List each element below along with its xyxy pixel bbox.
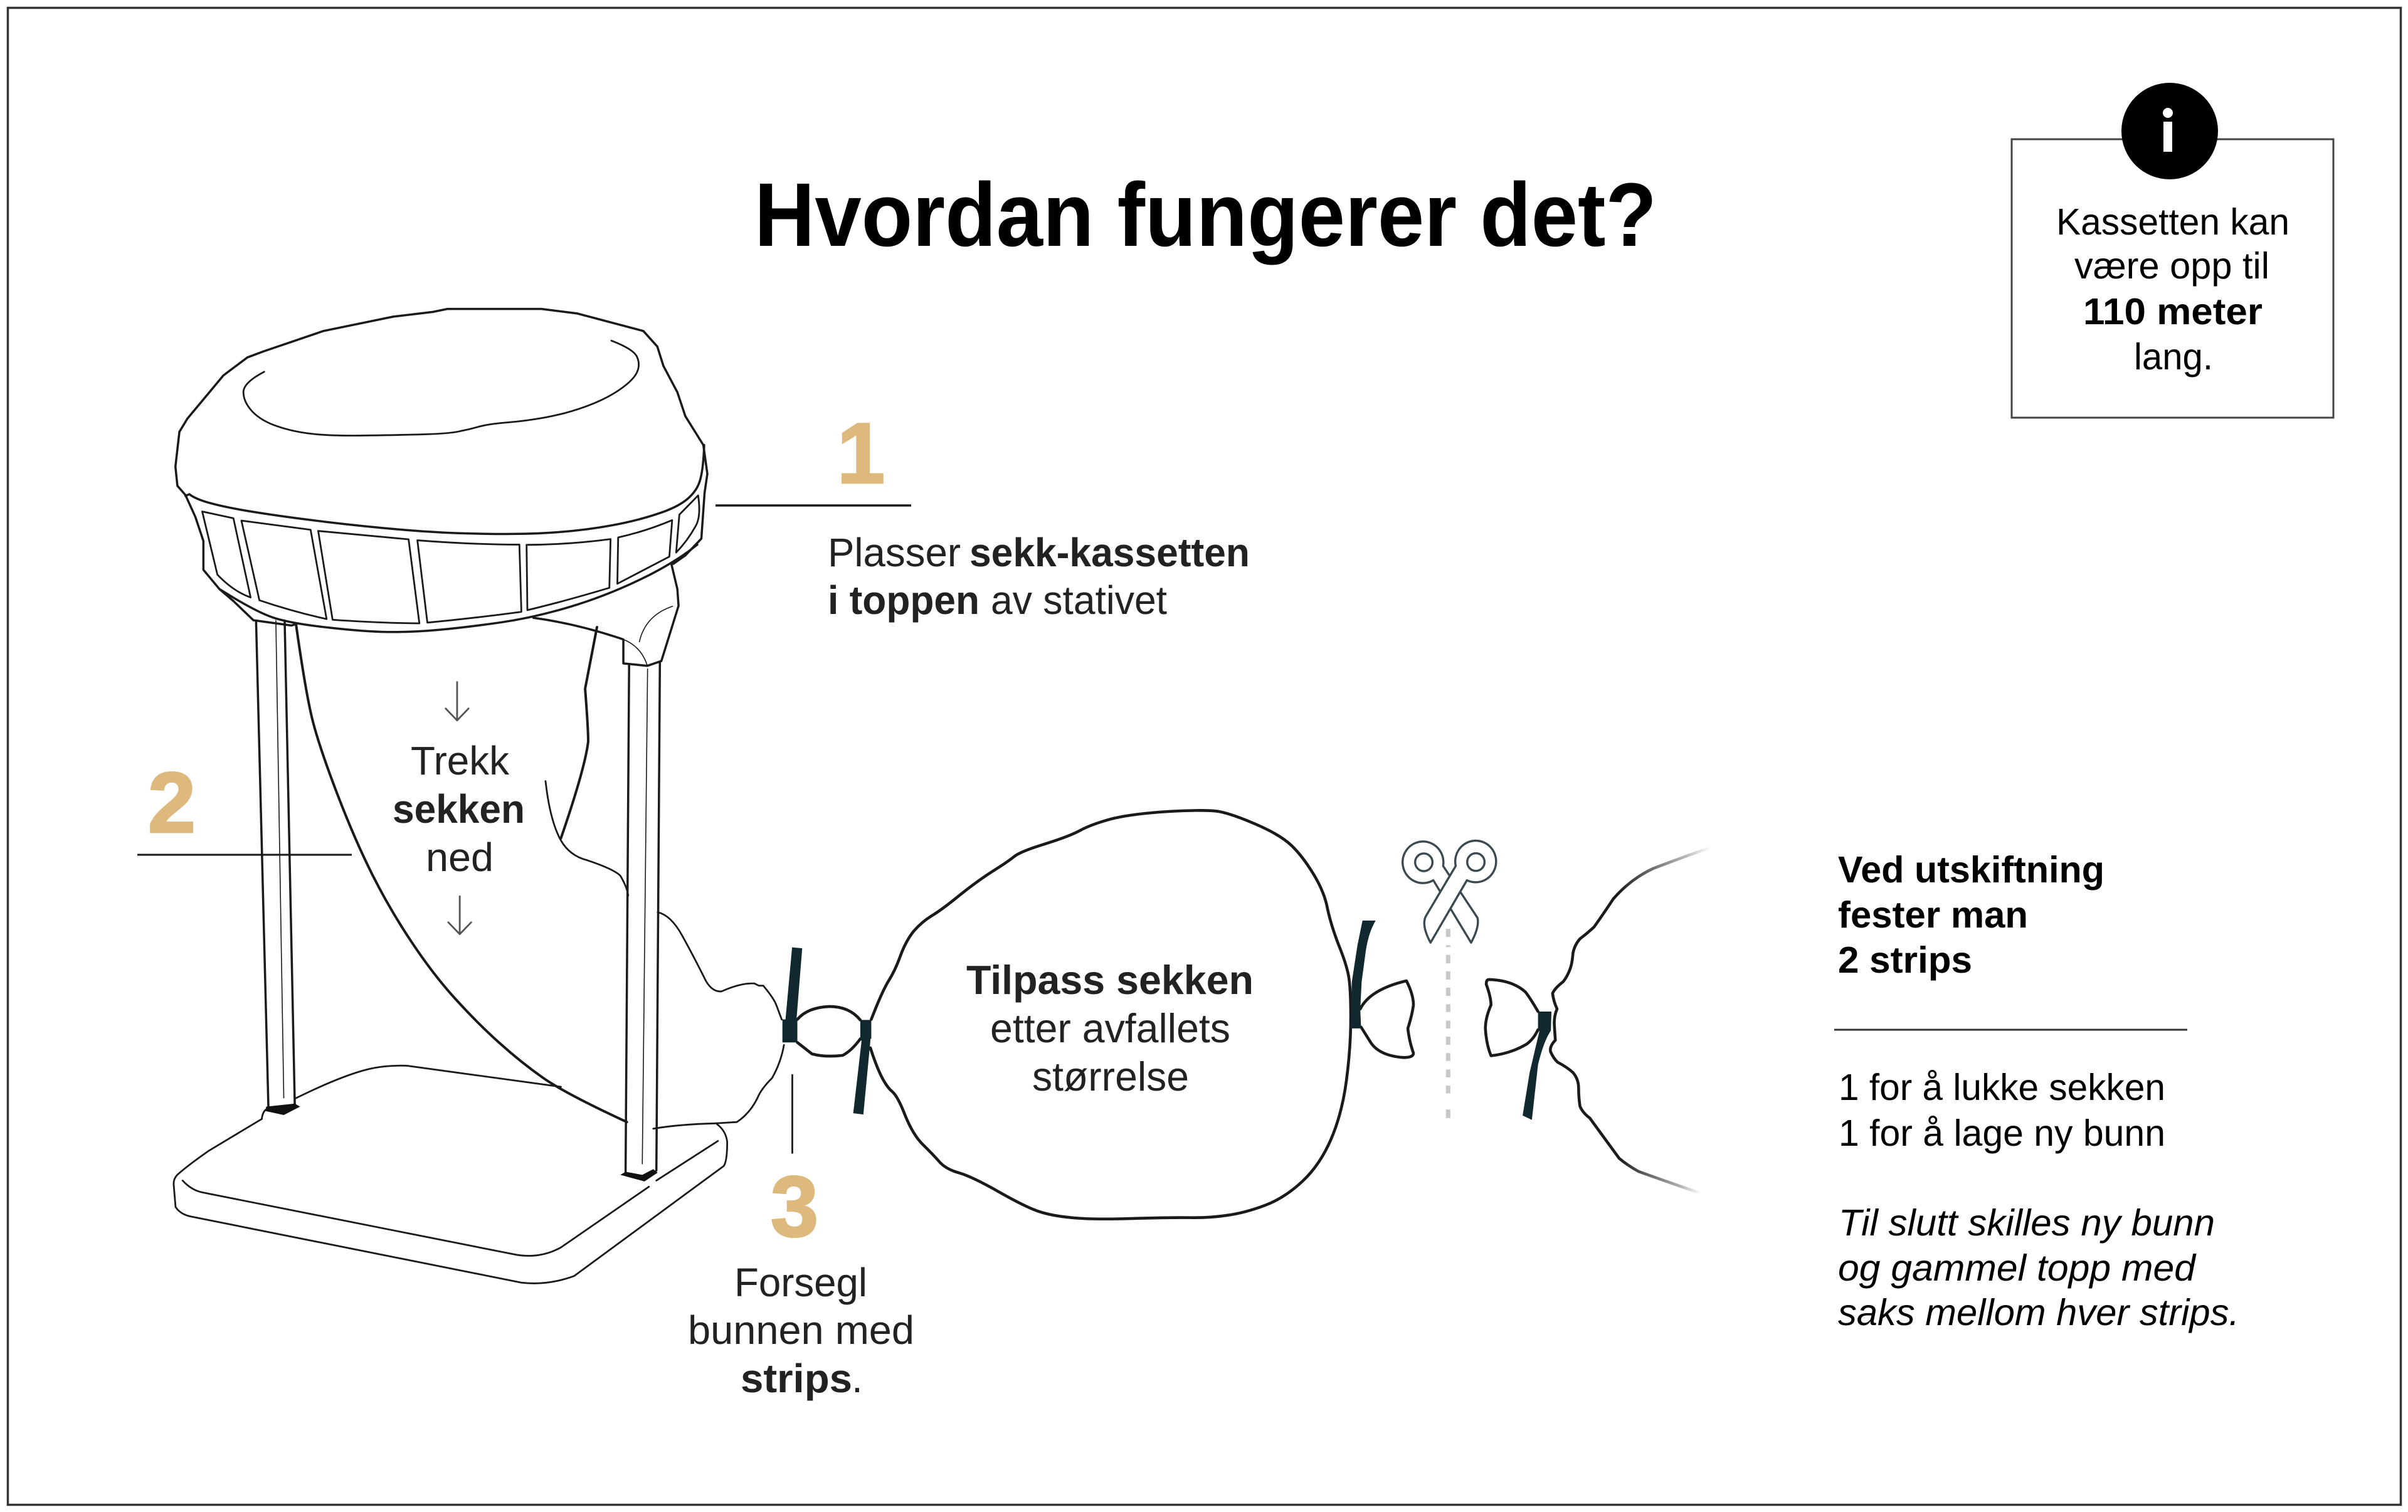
step 2 text: sekken xyxy=(393,786,525,832)
right strip xyxy=(1523,1012,1551,1120)
band upper edge xyxy=(186,445,704,534)
step 1 text: Plasser xyxy=(828,530,961,575)
step 3 text: Forsegl xyxy=(734,1260,867,1305)
right leg xyxy=(620,662,660,1182)
icon: info circle xyxy=(2121,83,2218,179)
step 3 text: . xyxy=(852,1356,863,1401)
illustration: sealed bag xyxy=(783,810,1351,1219)
arrow: down lower xyxy=(448,896,471,934)
info text xyxy=(2056,201,2289,378)
step 3 text xyxy=(688,1260,914,1401)
step 1 text xyxy=(828,530,1250,623)
stand legs, base and bag xyxy=(174,620,792,1283)
step 3 xyxy=(688,1159,914,1401)
sealed bag text: Tilpass sekken xyxy=(966,957,1254,1003)
cut line dashed xyxy=(1446,929,1450,1118)
right bag upper fade xyxy=(1613,847,1713,899)
number 3: 3 xyxy=(771,1159,818,1255)
step 1 xyxy=(716,406,1250,623)
step 2 text xyxy=(393,738,525,880)
step 2 text: Trekk xyxy=(411,738,510,783)
band panels xyxy=(202,495,699,623)
bag behind leg to strip xyxy=(653,912,784,1129)
left leg xyxy=(256,620,300,1115)
info text: lang. xyxy=(2134,336,2213,378)
base plate xyxy=(174,1065,727,1283)
left connector xyxy=(219,589,297,625)
right knot end xyxy=(1486,980,1538,1055)
title: Hvordan fungerer det? xyxy=(754,164,1657,265)
step 2 pointer line xyxy=(137,854,352,855)
arrow: down upper xyxy=(446,682,468,721)
step 2 text: ned xyxy=(426,835,494,880)
note italic text xyxy=(1838,1202,2239,1333)
step 1 text: sekk-kassetten xyxy=(969,530,1250,575)
illustration: stand with bag cassette xyxy=(174,309,792,1283)
info box frame xyxy=(2012,139,2333,418)
knot between strips xyxy=(798,1007,860,1056)
right bag lower fade xyxy=(1619,1158,1703,1194)
panel: info box xyxy=(2012,83,2333,418)
strip 1 xyxy=(783,948,802,1042)
number 1: 1 xyxy=(837,406,885,502)
number 2: 2 xyxy=(148,755,196,851)
step 3 text: bunnen med xyxy=(688,1308,914,1353)
right bag middle xyxy=(1550,899,1619,1158)
note list: 1 for å lukke sekken xyxy=(1839,1067,2165,1108)
band lower edge and left side xyxy=(186,495,697,632)
note italic text: Til slutt skilles ny bunn xyxy=(1839,1202,2215,1244)
note list xyxy=(1839,1067,2165,1154)
connector fold lines xyxy=(623,606,673,666)
note heading xyxy=(1838,849,2104,981)
right connector xyxy=(534,564,679,666)
note heading: Ved utskiftning xyxy=(1838,849,2104,891)
sealed bag text: etter avfallets xyxy=(990,1005,1230,1051)
note heading: fester man xyxy=(1838,894,2028,936)
step 2 xyxy=(137,738,525,880)
replacement note xyxy=(1834,849,2239,1333)
step 1 text: av stativet xyxy=(991,578,1167,623)
note list: 1 for å lage ny bunn xyxy=(1839,1113,2165,1154)
step 3 text: strips xyxy=(741,1356,852,1401)
note divider xyxy=(1834,1028,2187,1031)
left knot end xyxy=(1360,981,1413,1057)
left strip xyxy=(1351,921,1376,1028)
bag front curve xyxy=(296,625,627,1122)
step 1 text: i toppen xyxy=(828,578,980,623)
icon: scissors xyxy=(1403,841,1496,943)
pointer line to step 3 xyxy=(791,1075,793,1153)
step 1 pointer line xyxy=(716,504,911,507)
cassette top and band xyxy=(176,309,707,666)
strip 2 xyxy=(853,1020,871,1114)
info text: være opp til xyxy=(2074,245,2269,287)
bag top outline xyxy=(176,309,707,564)
bag back fold xyxy=(561,627,597,838)
bag blob outline xyxy=(870,810,1351,1219)
note italic text: saks mellom hver strips. xyxy=(1838,1292,2239,1333)
info text: Kassetten kan xyxy=(2056,201,2289,243)
sealed bag text xyxy=(966,957,1254,1099)
bag fold lower xyxy=(546,781,628,896)
note italic text: og gammel topp med xyxy=(1838,1247,2197,1289)
illustration: cutting between strips xyxy=(1351,841,1619,1158)
inner opening curve xyxy=(243,341,639,436)
note heading: 2 strips xyxy=(1838,939,1972,981)
info text: 110 meter xyxy=(2083,291,2263,332)
sealed bag text: størrelse xyxy=(1032,1054,1189,1099)
